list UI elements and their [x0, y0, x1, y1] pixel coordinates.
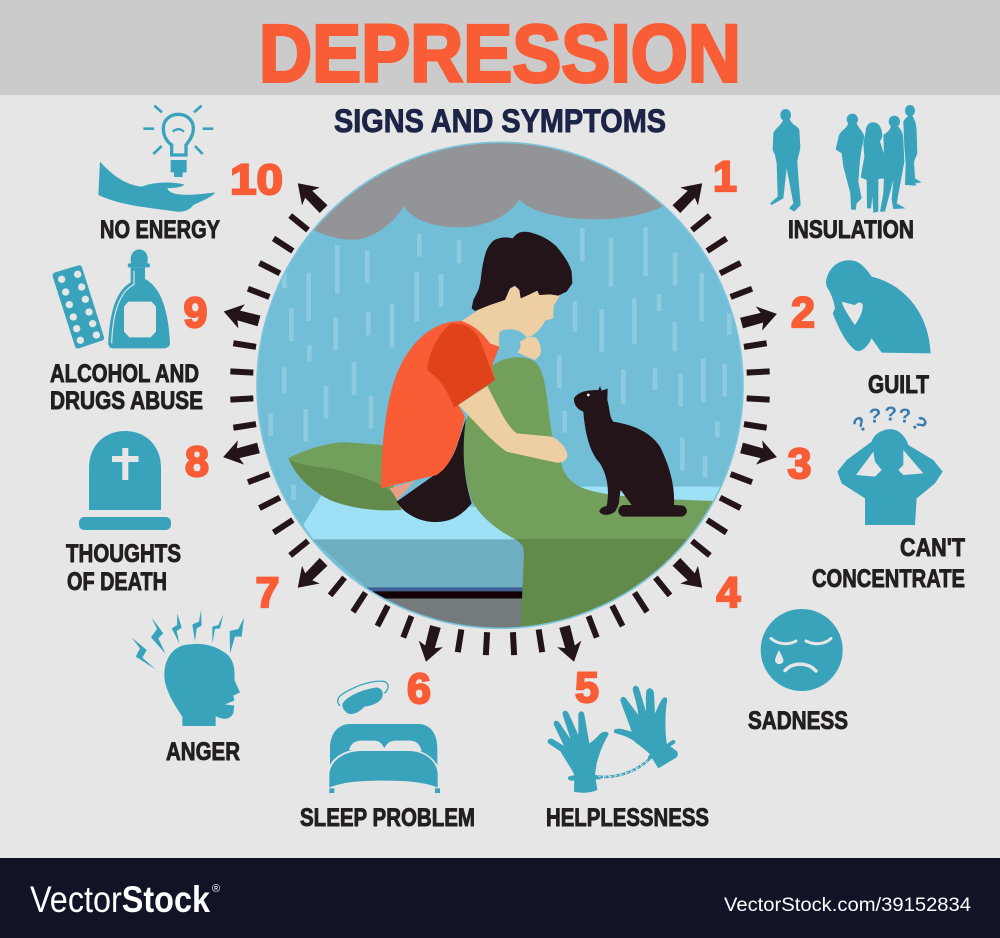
label line 2: OF DEATH — [67, 568, 167, 596]
label: ANGER — [166, 738, 240, 766]
footer registered mark: ® — [212, 883, 220, 895]
label line 2: CONCENTRATE — [812, 565, 965, 593]
icon: confused person: ? — [849, 412, 872, 438]
number: 2 — [791, 289, 815, 337]
icon: head in hands — [826, 260, 931, 353]
label: SLEEP PROBLEM — [300, 804, 475, 832]
label: GUILT — [868, 371, 929, 399]
number: 4 — [717, 569, 741, 617]
label: ALCOHOL AND — [50, 360, 199, 388]
icon: tombstone — [79, 431, 171, 530]
icon: bed and sleep mask — [329, 681, 440, 793]
icon: crying face — [761, 609, 843, 691]
panel: symptom 8 thoughts of death — [66, 431, 209, 596]
number: 1 — [713, 153, 737, 201]
label: CAN'T — [900, 534, 965, 562]
pillow — [288, 442, 398, 502]
icon: light bulb over hand — [98, 106, 215, 212]
bed — [304, 496, 516, 540]
number: 8 — [185, 438, 209, 486]
label: THOUGHTS — [66, 540, 181, 568]
icon: confused person: ? — [869, 404, 881, 427]
person — [390, 481, 415, 500]
cat — [574, 386, 687, 517]
panel: symptom 4 sadness — [717, 569, 848, 735]
number: 10 — [230, 156, 283, 204]
central illustration: person and cat in the rain — [257, 137, 743, 643]
panel: symptom 7 anger — [132, 569, 279, 766]
label: NO ENERGY — [100, 216, 220, 244]
number: 3 — [788, 440, 811, 488]
panel: symptom 10 no energy — [98, 106, 283, 244]
icon: people silhouettes — [770, 105, 922, 213]
panel: symptom 1 insulation — [713, 105, 922, 244]
icon: confused person: ? — [884, 402, 897, 425]
label: SADNESS — [748, 707, 848, 735]
panel: symptom 5 helplessness — [546, 664, 709, 832]
number: 7 — [256, 569, 279, 617]
panel: symptom 3 can't concentrate — [788, 402, 965, 593]
footer url: VectorStock.com/39152834 — [724, 895, 971, 916]
icon: confused person: ? — [906, 412, 932, 436]
subtitle: SIGNS AND SYMPTOMS — [334, 103, 666, 139]
footer band — [0, 858, 1000, 938]
icon: confused person — [837, 402, 943, 525]
panel: symptom 2 guilt — [791, 260, 931, 399]
arrows — [220, 174, 780, 665]
number: 9 — [184, 289, 207, 337]
blanket — [464, 357, 715, 540]
panel: symptom 6 sleep problem — [300, 665, 475, 832]
icon: confused person: ? — [899, 404, 911, 427]
label: INSULATION — [788, 216, 914, 244]
cloud — [313, 137, 663, 240]
tick ring — [230, 213, 770, 655]
number: 5 — [575, 664, 599, 712]
icon: chained hands — [548, 686, 678, 793]
title: DEPRESSION — [259, 8, 741, 100]
icon: head with lightning bolts — [132, 610, 244, 726]
number: 6 — [407, 665, 431, 713]
panel: symptom 9 alcohol and drugs abuse — [50, 249, 207, 415]
label: HELPLESSNESS — [546, 804, 709, 832]
header band — [0, 0, 1000, 95]
label line 2: DRUGS ABUSE — [50, 387, 203, 415]
icon: pills and bottle — [53, 249, 170, 348]
footer logo: VectorStock — [30, 879, 210, 920]
